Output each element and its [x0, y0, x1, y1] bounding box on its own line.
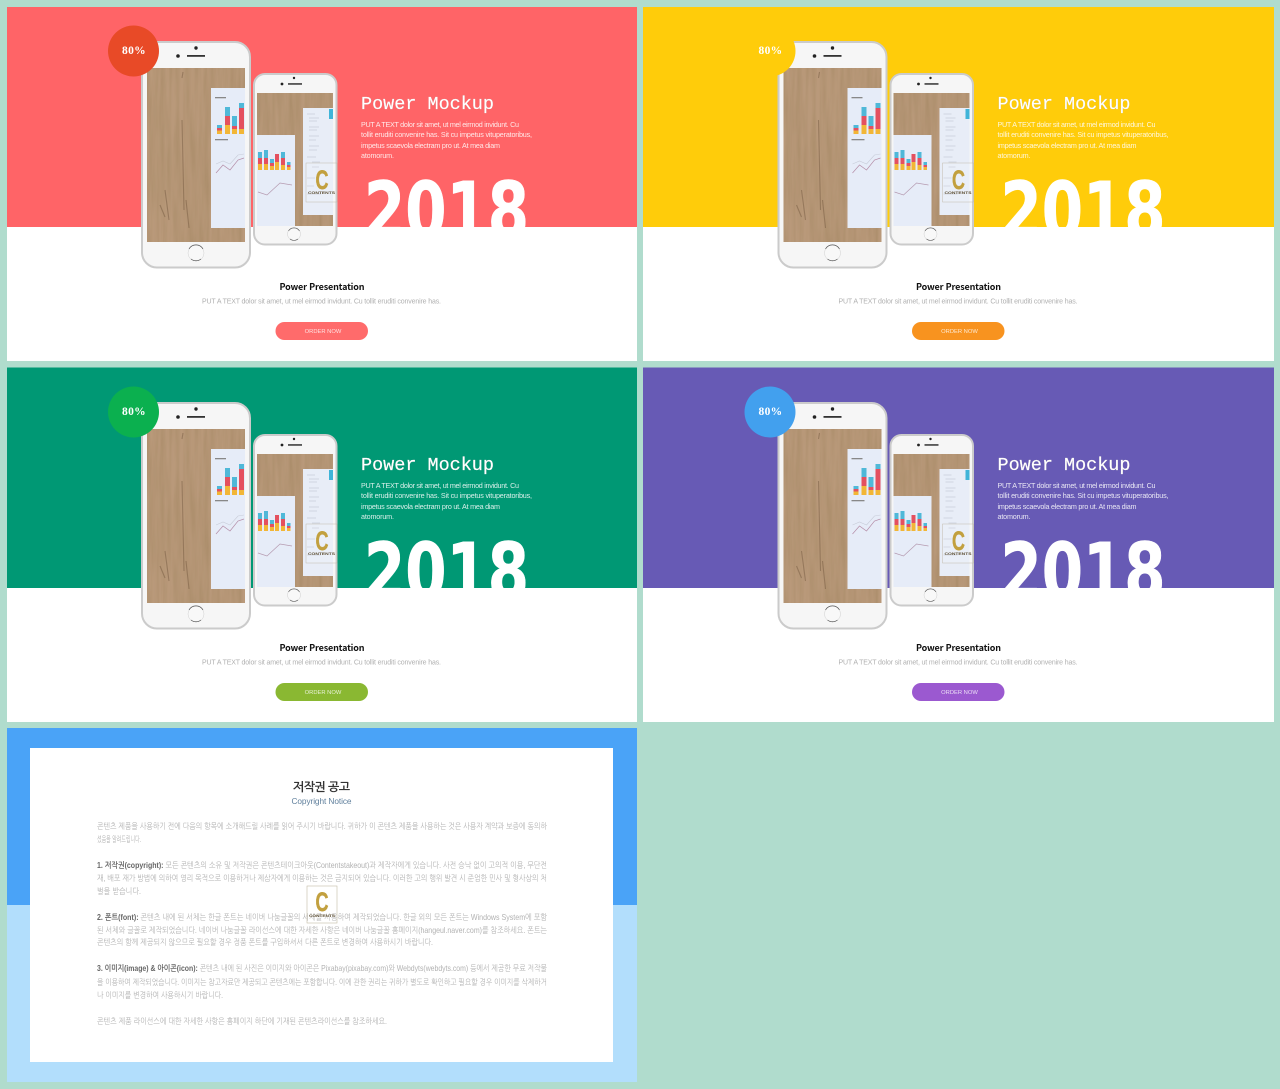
watermark: C — [952, 165, 965, 195]
purple header band — [643, 368, 1274, 588]
section 2: font: 콘텐츠의 함께 제공되지 않으므로 필요할 경우 정품 폰트를 구입하셔서 다른 폰트로 변경하여 사용하시기 바랍니다. — [97, 937, 433, 947]
intro paragraph: 셨음을 알려드립니다. — [97, 834, 141, 844]
phone mockups — [142, 42, 336, 268]
description text: impetus scaevola electram pro ut. At mea diam — [361, 141, 500, 150]
heading: Power Mockup: Power Mockup — [998, 455, 1130, 476]
watermark: C — [316, 526, 328, 556]
phone mockups — [142, 403, 336, 628]
blue upper background — [7, 728, 637, 905]
watermark — [942, 163, 974, 202]
white lower section — [7, 227, 637, 361]
section 3: image and icon: 을 이용하여 제작되었습니다. 이미지는 참고자료만 제공되고 콘텐츠에는 포함합니다. 이에 관한 권리는 귀하가 별도로 확인하고 필요할 경우 이미지를 삭제하거 — [97, 977, 547, 987]
description text: atomorum. — [361, 512, 394, 521]
section 3: image and icon — [97, 963, 547, 1000]
panel: coral mockup — [7, 7, 637, 361]
badge: 80%: 80% — [122, 45, 146, 57]
description text: atomorum. — [361, 151, 394, 160]
description text: tollit eruditi convenire has. Sit cu impetus vituperatoribus, — [361, 491, 532, 500]
badge: 80% — [108, 26, 159, 76]
white lower section — [643, 227, 1274, 361]
white card — [30, 748, 613, 1062]
badge: 80%: 80% — [122, 406, 146, 418]
section 1: copyright: 1. 저작권(copyright): 모든 콘텐츠의 소유 및 저작권은 콘텐츠테이크아웃(Contentstakeout)과 제작자에게 있습니다. 사전 승낙 없이 고의적 이용, 무단전 — [97, 860, 547, 870]
badge: 80% — [744, 386, 796, 438]
watermark: C — [316, 165, 328, 195]
watermark: C — [952, 526, 965, 556]
big year 2018: 2018 — [1000, 167, 1166, 257]
white lower section — [643, 588, 1274, 722]
big year 2018: 2018 — [364, 167, 529, 257]
description text: PUT A TEXT dolor sit amet, ut mel eirmod invidunt. Cu — [361, 120, 519, 129]
description text: PUT A TEXT dolor sit amet, ut mel eirmod invidunt. Cu — [998, 120, 1156, 129]
description text: tollit eruditi convenire has. Sit cu impetus vituperatoribus, — [998, 491, 1168, 500]
description text: impetus scaevola electram pro ut. At mea diam — [998, 502, 1136, 511]
subheading: Power Presentation — [280, 641, 365, 654]
button: order now — [276, 683, 368, 701]
button: order now — [912, 683, 1004, 701]
section 2: font: 된 서체와 글꼴로 제작되었습니다. 네이버 나눔글꼴 라이선스에 대한 자세한 사항은 네이버 나눔글꼴 홈페이지(hangeul.naver.com)를 참조하세요. 폰트는 — [97, 925, 547, 935]
badge: 80% — [744, 26, 796, 76]
button: order now — [912, 322, 1004, 340]
section 1: copyright — [97, 860, 547, 896]
watermark — [306, 163, 337, 202]
closing line: 콘텐츠 제품 라이선스에 대한 자세한 사항은 홈페이지 하단에 기재된 콘텐츠라이선스를 참조하세요. — [97, 1016, 387, 1026]
watermark — [307, 886, 337, 923]
description text: atomorum. — [998, 151, 1030, 160]
panel: yellow mockup — [643, 7, 1274, 361]
intro paragraph: 콘텐츠 제품을 사용하기 전에 다음의 항목에 소개해드릴 사례를 읽어 주시기 바랍니다. 귀하가 이 콘텐츠 제품을 사용하는 것은 사용자 계약과 보증에 동의하 — [97, 821, 547, 831]
watermark: CONTENTS — [308, 551, 335, 556]
intro paragraph — [97, 821, 547, 844]
notice title: 저작권 공고 — [293, 780, 351, 794]
subheading: Power Presentation — [280, 280, 365, 293]
watermark — [942, 524, 974, 563]
sub text: PUT A TEXT dolor sit amet, ut mel eirmod invidunt. Cu tollit eruditi convenire has. — [202, 298, 441, 306]
button: order now: ORDER NOW — [941, 329, 978, 335]
heading: Power Mockup: Power Mockup — [361, 94, 494, 115]
watermark: C — [316, 887, 328, 917]
description text: tollit eruditi convenire has. Sit cu impetus vituperatoribus, — [361, 130, 532, 139]
phone mockups — [778, 42, 973, 268]
description text: impetus scaevola electram pro ut. At mea diam — [998, 141, 1136, 150]
section 2: font — [97, 912, 547, 947]
watermark: CONTENTS — [309, 913, 335, 918]
notice subtitle: Copyright Notice — [292, 796, 352, 806]
subheading: Power Presentation — [916, 280, 1001, 293]
description text — [361, 481, 532, 521]
description text: impetus scaevola electram pro ut. At mea diam — [361, 502, 500, 511]
description text: PUT A TEXT dolor sit amet, ut mel eirmod invidunt. Cu — [361, 481, 519, 490]
badge: 80% — [108, 386, 159, 438]
heading: Power Mockup: Power Mockup — [998, 94, 1130, 115]
sub text: PUT A TEXT dolor sit amet, ut mel eirmod invidunt. Cu tollit eruditi convenire has. — [838, 660, 1078, 666]
panel: green mockup — [7, 368, 637, 722]
sub text: PUT A TEXT dolor sit amet, ut mel eirmod invidunt. Cu tollit eruditi convenire has. — [838, 298, 1078, 306]
section 1: copyright: 벌을 받습니다. — [97, 886, 141, 896]
section 3: image and icon: 나 이미지를 변경하여 사용하시기 바랍니다. — [97, 990, 223, 1000]
white lower section — [7, 588, 637, 722]
description text — [361, 120, 532, 160]
panel: purple mockup — [643, 368, 1274, 722]
section 3: image and icon: 3. 이미지(image) & 아이콘(icon): 콘텐츠 내에 된 사진은 이미지와 아이콘은 Pixabay(pixabay.com)와 Webdyts(webdyts.com) 등에서 제공한 무료 저작물 — [97, 963, 547, 973]
section 2: font: 2. 폰트(font): 콘텐츠 내에 된 서체는 한글 폰트는 네이버 나눔글꼴의 서체를 사용하여 제작되었습니다. 한글 외의 모든 폰트는 Windows System에 포함 — [97, 912, 547, 922]
big year 2018: 2018 — [364, 528, 529, 618]
light blue lower background — [7, 905, 637, 1082]
description text: PUT A TEXT dolor sit amet, ut mel eirmod invidunt. Cu — [998, 481, 1156, 490]
phone mockups — [778, 403, 973, 628]
subheading: Power Presentation — [916, 641, 1001, 654]
description text: atomorum. — [998, 512, 1030, 521]
big year 2018: 2018 — [1000, 528, 1166, 618]
button: order now: ORDER NOW — [305, 329, 342, 335]
sub text: PUT A TEXT dolor sit amet, ut mel eirmod invidunt. Cu tollit eruditi convenire has. — [202, 660, 441, 666]
panel: copyright notice — [7, 728, 637, 1082]
watermark — [306, 524, 337, 563]
section 1: copyright: 재, 배포 재가 방법에 의하여 영리 목적으로 이용하거나 제삼자에게 이용하는 것은 금지되어 있습니다. 이러한 고의 행위 발견 시 준엄한 민사 및 형사상의 처 — [97, 873, 547, 883]
yellow header band — [643, 7, 1274, 227]
button: order now — [276, 322, 368, 340]
description text — [998, 481, 1168, 521]
heading: Power Mockup: Power Mockup — [361, 455, 494, 476]
watermark: CONTENTS — [944, 190, 972, 195]
button: order now: ORDER NOW — [941, 690, 978, 696]
badge: 80%: 80% — [759, 45, 782, 57]
watermark: CONTENTS — [308, 190, 335, 195]
description text — [998, 120, 1168, 160]
description text: tollit eruditi convenire has. Sit cu impetus vituperatoribus, — [998, 130, 1168, 139]
badge: 80%: 80% — [759, 406, 782, 418]
watermark: CONTENTS — [944, 551, 972, 556]
button: order now: ORDER NOW — [305, 690, 342, 696]
coral header band — [7, 7, 637, 227]
green header band — [7, 368, 637, 588]
